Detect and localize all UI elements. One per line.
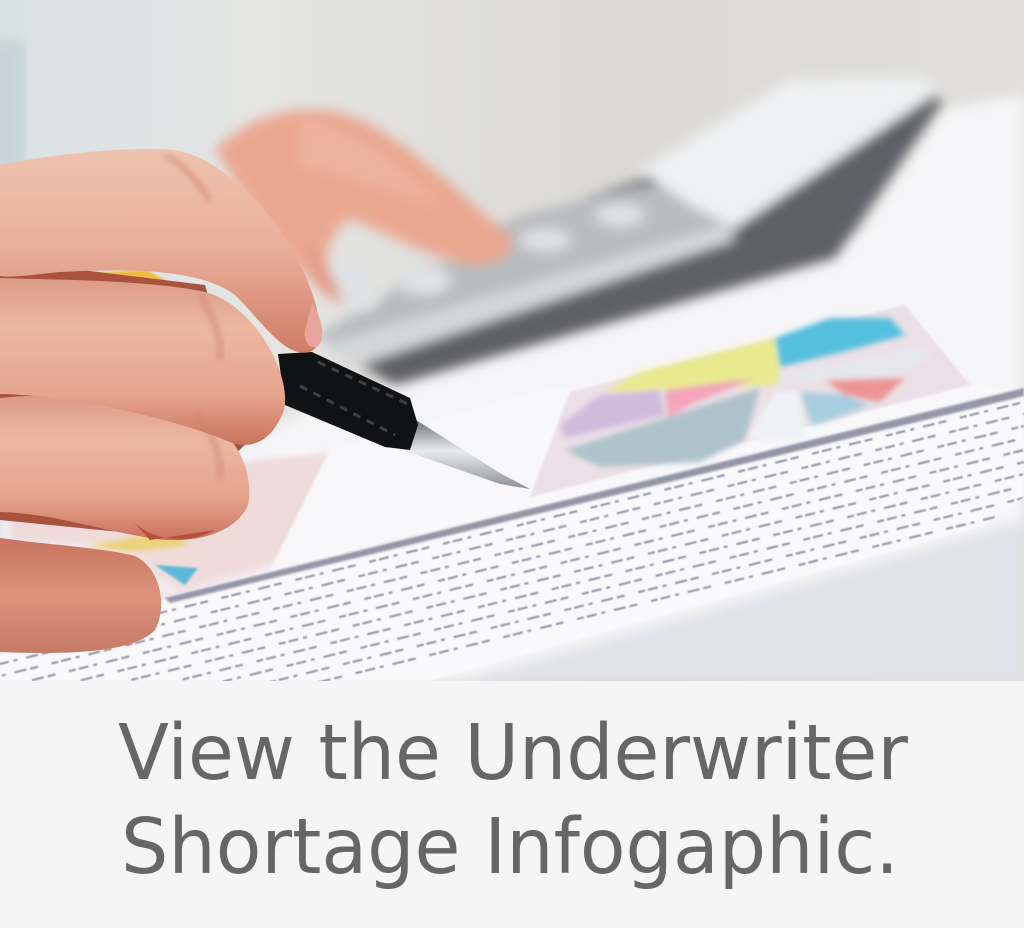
blurred background wall [0,0,1024,681]
printed data sheet [0,387,1024,681]
front hand holding the pen [0,149,322,653]
ring finger [0,395,249,540]
palm shadow [0,260,250,535]
photo: hand holding a pen over financial charts and a calculator [0,0,1024,681]
pie chart [560,318,930,467]
knuckle shading [165,155,220,480]
pen grip [278,352,418,450]
lower left sheet with chart [0,450,330,640]
calculator [314,78,942,385]
pie chart panel [530,305,970,497]
back hand on calculator [215,110,512,305]
caption heading: View the Underwriter [118,709,908,798]
fingernail [305,303,322,347]
middle finger [0,278,285,445]
little finger [0,538,161,653]
index finger [0,149,320,353]
caption heading [118,709,908,892]
pen [278,352,530,489]
white report page [160,385,1024,600]
desk surface [0,95,1024,681]
caption heading: Shortage Infogaphic. [121,803,899,892]
pen tip [403,420,530,489]
caption panel [0,681,1024,928]
pencil [55,270,178,290]
rows of small figures [0,402,1024,681]
